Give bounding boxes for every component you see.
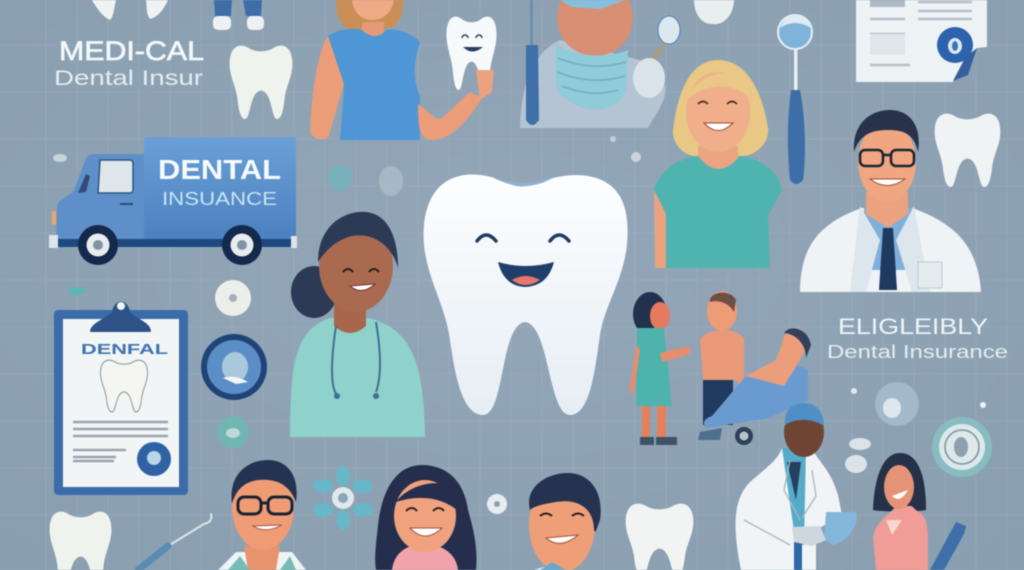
text: Medi-Cal heading: Dental Insur [54,67,203,90]
icon: teal flower [313,466,373,530]
icon: dental explorer tool [138,514,211,570]
icon: small white flower [487,494,507,514]
text: Eligibly Dental Insurance: Dental Insurance [827,342,1008,362]
person: woman with dark hair in teal scrubs [290,212,425,437]
icon: small decorative molecules centre top [328,136,641,196]
text: Medi-Cal heading [54,36,204,90]
icon: tooth upper right [935,114,1000,187]
text: Medi-Cal heading: MEDI-CAL [59,36,204,66]
icon: dental tool left of masked dentist [526,0,539,125]
text: truck label: DENTAL [158,154,281,185]
icon: clipboard seal [137,442,171,476]
illustration: delivery truck with Dental Insurance [49,137,297,265]
person: blond woman in teal [654,60,782,268]
text: Eligibly Dental Insurance [827,314,1008,362]
icon: blue chair handle [930,522,966,570]
icon: round magnifier badge [201,334,267,400]
text: truck label: INSUANCE [162,189,277,209]
person: man bottom center right [529,473,601,570]
panel: certificate top right [856,0,987,82]
icon: bottom tooth [626,504,693,570]
main icon: big smiling tooth [424,174,628,415]
icon: teal badge [217,416,249,448]
panel: dental clipboard [54,302,188,495]
icon: tooth outline [100,360,148,412]
person: woman in blue top holding tooth [310,0,497,140]
illustration: children with seated patient [629,291,811,445]
icon: dental mirror [778,15,812,184]
person: doctor with clipboard [736,403,857,570]
icon: top-left tooth fragment [92,0,168,20]
person: male dentist with glasses [800,110,981,292]
person: man with glasses bottom left [218,460,306,570]
text: truck label [158,154,281,209]
text: Eligibly Dental Insurance: ELIGLEIBLY [838,314,988,339]
icon: faint bubble [851,382,986,426]
person: woman in pink [873,453,928,570]
icon: bottom left tooth [50,512,111,570]
icon: seal [937,27,973,63]
icon: small cream flower [215,280,251,316]
icon: round teal dial [932,417,992,477]
icon: small tooth top center [694,0,734,24]
icon: tooth upper left [230,46,292,119]
person: woman bottom center [375,465,477,570]
icon: faint cloud pieces [845,438,871,473]
illustration: masked dentist [520,0,680,128]
icon: smiling tooth held [446,17,497,90]
person: legs at top [213,0,264,30]
text: clipboard heading: DENFAL [81,341,168,358]
